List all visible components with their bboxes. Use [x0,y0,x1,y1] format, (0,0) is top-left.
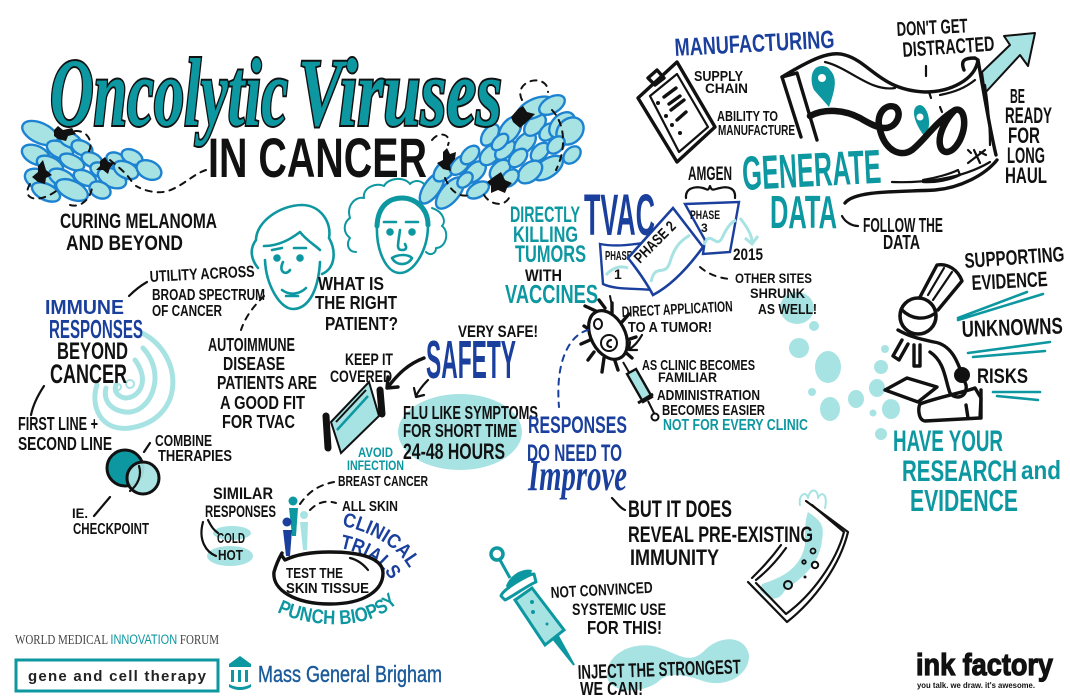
dashed connector: other sites [700,267,730,279]
icon: spiral [95,333,173,428]
text: avoid infection: INFECTION [347,457,404,473]
heading: responses do need to improve [527,412,627,500]
speech bubble: test the skin tissue: TEST THE [286,565,343,582]
icon: mask [326,382,382,453]
text: what is the right patient: PATIENT? [325,314,398,334]
text: don't get distracted: DON'T GET [896,15,968,41]
text: be ready for long haul: BE [1010,86,1025,108]
icon: microscope [885,265,981,421]
logo: ink factory: you talk. we draw. it's awesome. [917,680,1035,690]
connector: first line [31,386,44,415]
connector: combine [94,443,150,516]
text: pre-existing immunity [628,496,813,570]
text: similar responses: RESPONSES [205,502,276,521]
text: pre-existing immunity: BUT IT DOES [628,496,732,523]
text: utility: BROAD SPECTRUM [152,287,265,304]
cold hot: COLD [217,530,245,547]
text: combine therapies [155,433,232,465]
text: be ready for long haul [1005,86,1052,188]
text: supply chain [694,68,795,139]
callout: inject the strongest: WE CAN! [580,679,643,699]
icon: small syringe [623,362,658,420]
chart: phase 1: PHASE [605,248,632,263]
icon: woman face [345,179,446,273]
heading: responses do need to improve: Improve [527,451,627,500]
symptoms callout: 24-48 HOURS [403,439,505,464]
text: be ready for long haul: HAUL [1005,163,1047,188]
subtitle [60,210,217,255]
text: directly killing tumors with vaccines: KILLING [513,222,578,247]
symptoms callout: FLU LIKE SYMPTOMS [403,403,538,423]
text: first line: FIRST LINE + [18,414,98,434]
text: keep it covered: KEEP IT [345,350,393,369]
subtitle: AND BEYOND [66,232,183,255]
icon: tissue strip [748,490,848,622]
heading: manufacturing: MANUFACTURING [674,26,835,62]
text: breast cancer and all skin: ALL SKIN [342,498,398,515]
callout: inject the strongest: INJECT THE STRONGEST [577,656,741,684]
logo: ink factory: ink factory [916,647,1054,682]
heading: amgen: AMGEN [688,164,732,185]
text: first line [18,414,112,454]
logo: world medical innovation forum [15,632,219,691]
text: checkpoint: IE. [72,505,88,521]
text: directly killing tumors with vaccines: VACCINES [505,279,598,309]
dots: light teal bubbles [780,292,900,440]
text: supporting evidence, unknowns, risks [961,243,1065,388]
text: supply chain: ABILITY TO [717,108,778,125]
text: avoid infection: AVOID [358,444,393,460]
text: don't get distracted: DISTRACTED [902,33,995,62]
connector: but it does [612,498,625,510]
text: TVAC [584,183,655,248]
text: be ready for long haul: FOR [1008,123,1040,148]
text: checkpoint: CHECKPOINT [73,521,149,538]
chart: phase 1: 1 [614,266,622,282]
icon: venn diagram [107,450,159,494]
heading: responses do need to improve: RESPONSES [528,412,627,439]
text: autoimmune: AUTOIMMUNE [208,335,295,355]
text: don't get distracted [896,15,995,62]
text: first line: SECOND LINE [18,434,112,454]
virus cluster left [19,116,165,206]
chart: phase 3: PHASE [690,208,720,222]
heading: immune responses: BEYOND [57,338,128,365]
text: not convinced [550,580,666,638]
text: direct application: TO A TUMOR! [628,319,712,336]
text: clinic becomes familiar: FAMILIAR [658,369,717,385]
text: checkpoint [72,505,149,538]
icon: man face [252,205,334,309]
text: pre-existing immunity: IMMUNITY [630,545,719,570]
chart: phase 1 [600,243,652,290]
text: autoimmune [208,335,317,432]
text: autoimmune: PATIENTS ARE [217,373,317,393]
text: SAFETY [426,330,516,390]
logo: mass general brigham: Mass General Brigham [258,661,442,687]
chart: phase 2 [628,208,703,295]
heading: generate data: DATA [770,186,837,238]
text: what is the right patient [315,274,398,334]
connector: follow the data [842,216,858,226]
arrow: teal upward [982,33,1035,93]
text: be ready for long haul: LONG [1007,143,1045,168]
dashed connector: cell to responses [558,330,588,407]
logo: world medical innovation forum: gene and cell therapy [28,668,207,685]
cold hot [201,520,253,566]
heading: immune responses: IMMUNE [45,297,124,319]
symptoms callout [398,394,538,470]
text: direct application [621,298,733,336]
dashed connector to title [136,170,206,192]
arrow: safety to mask [387,358,424,388]
logo: world medical innovation forum: WORLD MEDICAL INNOVATION FORUM [15,632,219,647]
text: other sites shrunk: OTHER SITES [735,270,812,286]
heading: have your research and evidence: HAVE YOUR [893,425,1003,458]
text: punch biopsy: PUNCH BIOPSY [278,592,394,624]
arrow: to tumour [629,335,642,350]
text: breast cancer and all skin [338,473,428,515]
title: Oncolytic Viruses: Oncolytic [50,39,288,146]
virus cluster right [415,80,589,213]
connector: utility [129,282,147,296]
heading: clinical trials: CLINICAL [344,514,417,568]
text: follow the data: DATA [883,232,920,254]
icon: clipboard [638,62,715,162]
heading: immune responses [45,297,143,389]
text: pre-existing immunity: REVEAL PRE-EXISTING [628,522,813,547]
icon: winding road map [782,54,997,203]
text: combine therapies: COMBINE [155,433,212,450]
symptoms callout: FOR SHORT TIME [403,421,517,441]
dashed connector [241,296,264,330]
logo: mass general brigham [229,656,442,690]
chart: phase 3: 3 [701,221,708,235]
chart: phase 3 [685,202,758,254]
text: directly killing tumors with vaccines: WITH [525,266,562,285]
text: supporting evidence, unknowns, risks: RISKS [977,365,1028,388]
text: avoid infection [347,444,404,473]
speech bubble: test the skin tissue [274,552,383,604]
text: supply chain: SUPPLY [694,68,743,85]
text: supply chain: CHAIN [705,80,748,96]
text: not convinced: NOT CONVINCED [550,580,653,602]
text: utility [149,264,265,320]
teal emphasis lines [958,292,1050,400]
icon: large syringe [491,548,574,665]
text: clinic becomes familiar [642,357,765,419]
heading: have your research and evidence: EVIDENCE [910,483,1018,518]
dashed connector: phase to cell [610,296,612,306]
heading: have your research and evidence: RESEARCH [902,455,1017,488]
text: keep it covered [330,350,393,386]
text: 2015: 2015 [733,245,763,264]
text: autoimmune: A GOOD FIT [220,393,305,413]
subtitle: CURING MELANOMA [60,210,217,233]
dashed connectors: people [300,482,336,510]
heading: immune responses: RESPONSES [49,314,143,344]
text: what is the right patient: THE RIGHT [315,293,397,313]
text: similar responses [205,484,276,521]
text: clinic becomes familiar: ADMINISTRATION [657,387,760,404]
text: directly killing tumors with vaccines: DIRECTLY [510,202,580,227]
callout: inject the strongest [577,639,749,699]
text: not convinced: SYSTEMIC USE [572,600,666,619]
heading: have your research and evidence [893,425,1061,518]
cold hot: HOT [218,547,243,564]
text: breast cancer and all skin: BREAST CANCER [338,473,428,490]
heading: generate data: GENERATE [741,141,882,201]
text: very safe: VERY SAFE! [458,322,538,341]
text: other sites shrunk: AS WELL! [758,301,817,318]
text: autoimmune: FOR TVAC [222,412,295,432]
text: similar responses: SIMILAR [213,484,273,503]
text: autoimmune: DISEASE [223,354,285,374]
text: other sites shrunk [735,270,817,318]
text: follow the data [863,215,943,254]
heading: responses do need to improve: DO NEED TO [527,440,622,467]
bracket: amgen [686,186,735,198]
text: not convinced: FOR THIS! [587,618,662,638]
text: keep it covered: COVERED [330,367,392,386]
text: combine therapies: THERAPIES [158,448,232,465]
heading: clinical trials: TRIALS [342,534,400,578]
heading: have your research and evidence: and [1021,455,1061,485]
text: not for every clinic: NOT FOR EVERY CLINIC [663,417,808,434]
title: in cancer: IN CANCER [208,126,427,189]
text: directly killing tumors with vaccines: TUMORS [515,241,586,268]
text: clinic becomes familiar: BECOMES EASIER [662,402,765,419]
text: utility: OF CANCER [152,303,222,320]
title: Oncolytic Viruses: Viruses [298,39,502,146]
icon: tumour cell [581,300,636,372]
text: follow the data: FOLLOW THE [863,215,943,237]
text: what is the right patient: WHAT IS [318,274,384,294]
heading: generate data [741,141,882,238]
chart: phase 2: PHASE 2 [631,218,680,267]
heading: immune responses: CANCER [50,359,127,389]
text: supply chain: MANUFACTURE [718,122,795,139]
icon: people [282,496,308,556]
text: direct application: DIRECT APPLICATION [621,298,733,321]
text: other sites shrunk: SHRUNK [750,285,805,301]
text: utility: UTILITY ACROSS [149,264,255,286]
arrow: safety to symptoms [414,380,428,397]
speech bubble: test the skin tissue: SKIN TISSUE [286,580,369,597]
text: directly killing tumors with vaccines [505,202,598,309]
text: clinic becomes familiar: AS CLINIC BECOMES [642,357,755,374]
